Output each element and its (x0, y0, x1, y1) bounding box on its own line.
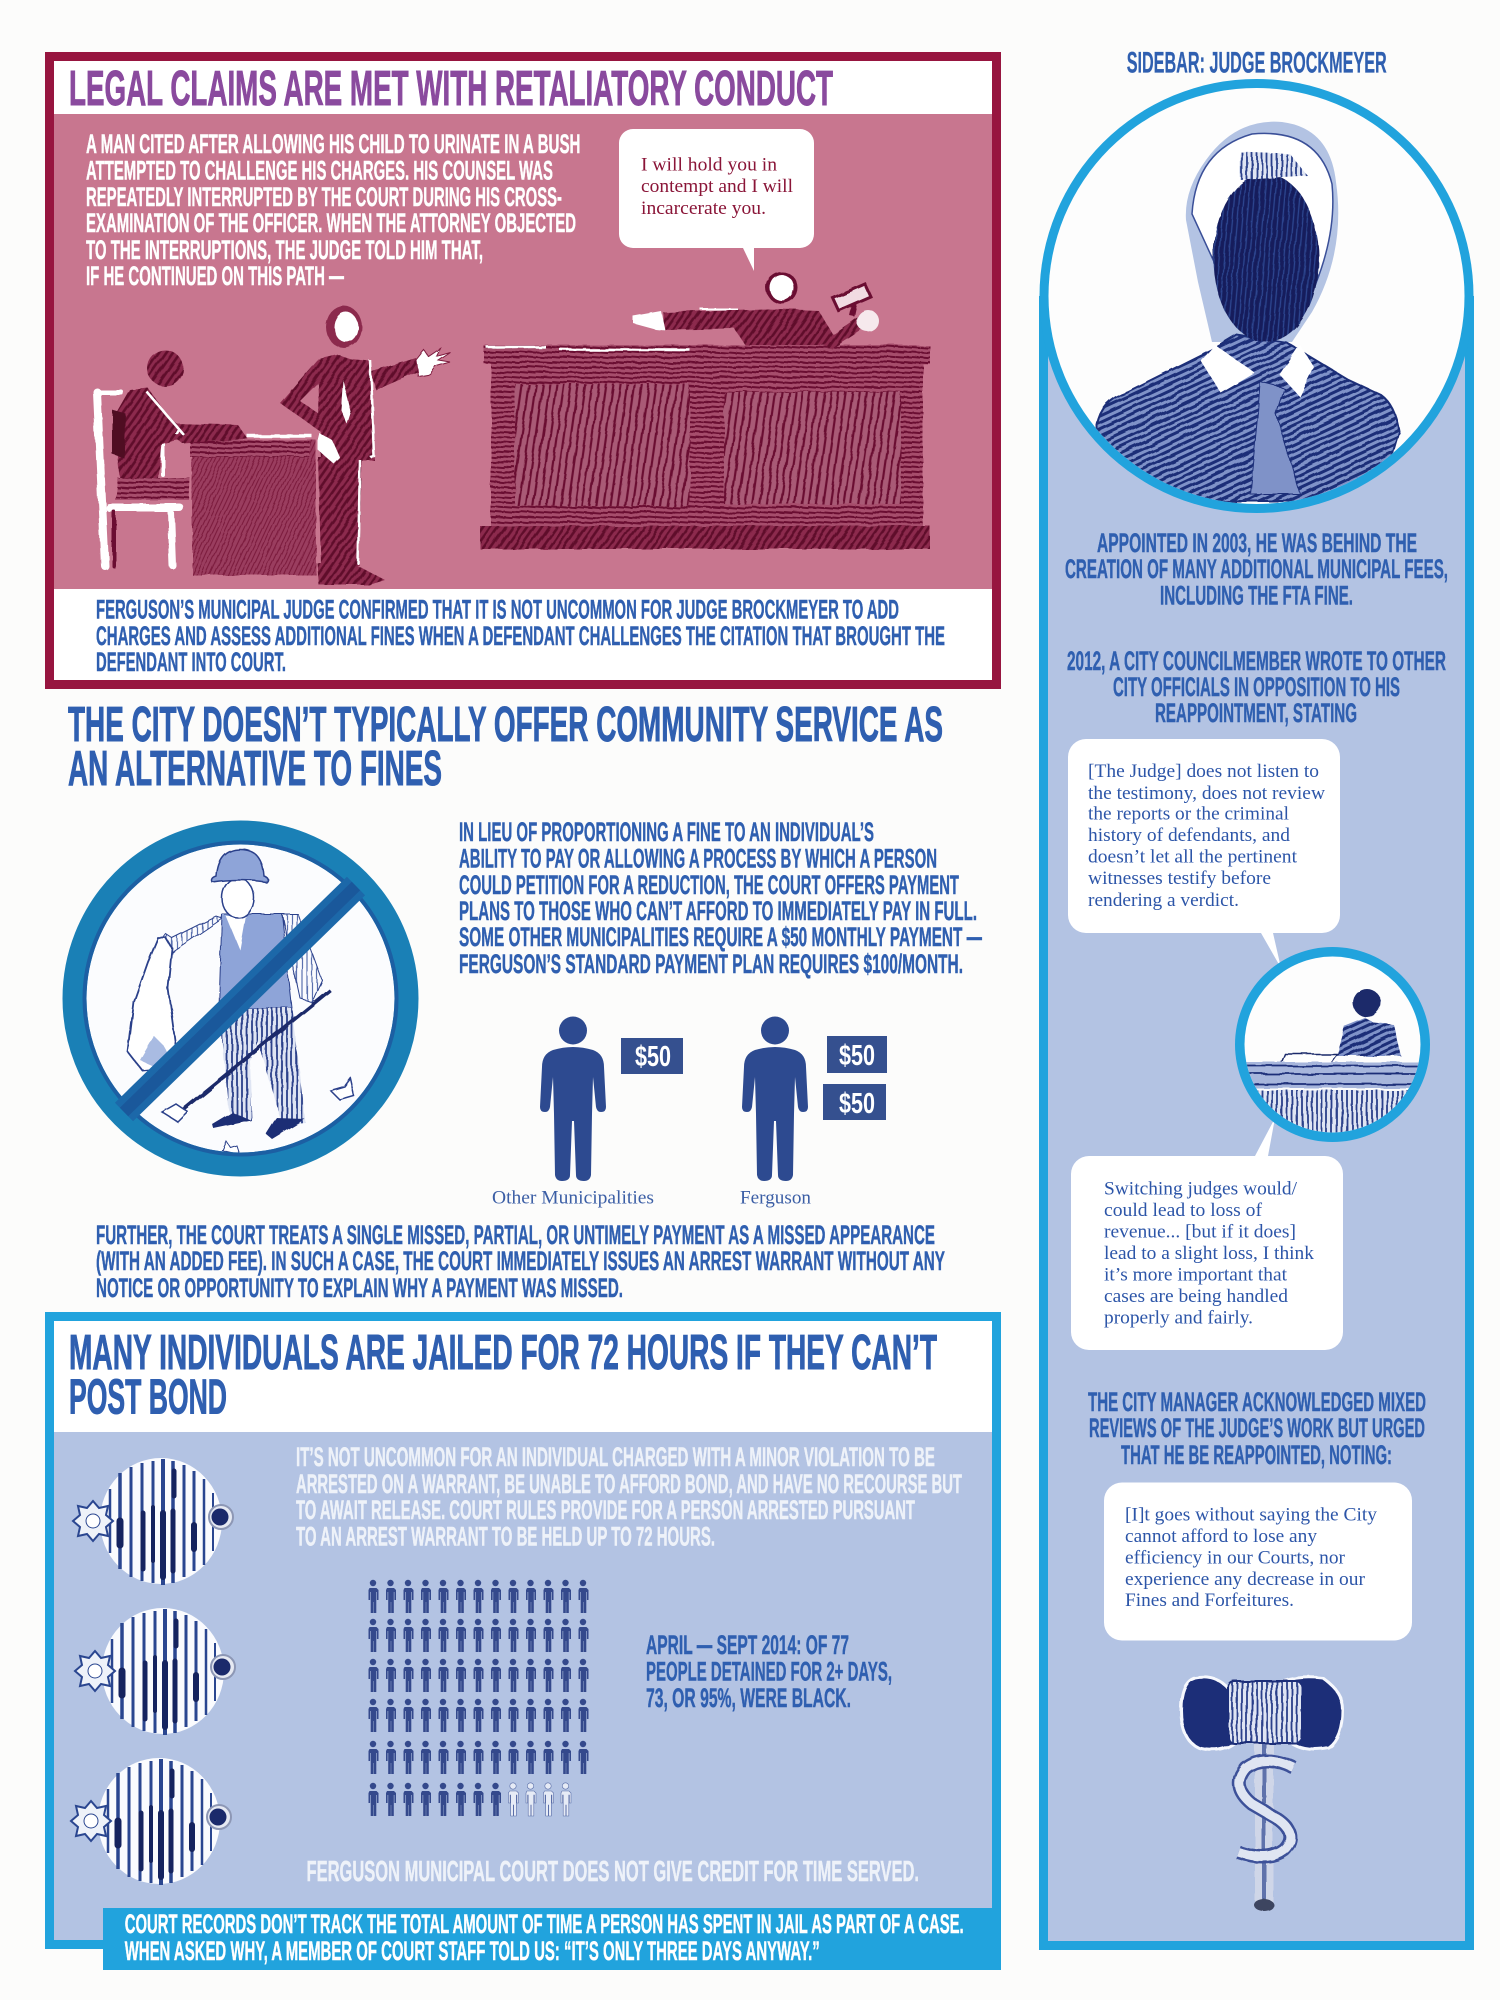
icon: fifty dollar bill: $50 (839, 1040, 875, 1072)
text block: man cited: A MAN CITED AFTER ALLOWING HIS CHILD TO URINATE IN A BUSH (86, 129, 580, 159)
chart: other municipalities pay one bill (492, 1016, 683, 1208)
icon: gavel with dollar-sign handle (1181, 1677, 1343, 1911)
speech bubble: switching judges: lead to a slight loss, I think (1104, 1244, 1315, 1264)
text block: minor violation: ARRESTED ON A WARRANT, BE UNABLE TO AFFORD BOND, AND HAVE NO RECOURSE BUT (296, 1469, 962, 1499)
defendant desk (190, 436, 316, 575)
text block: april to sept statistic: PEOPLE DETAINED FOR 2+ DAYS, (646, 1657, 892, 1687)
text block: missed payment: NOTICE OR OPPORTUNITY TO EXPLAIN WHY A PAYMENT WAS MISSED. (96, 1273, 623, 1303)
text block: in lieu (459, 817, 982, 979)
panel: jailed for 72 hours (45, 1312, 1001, 1970)
text block: municipal judge (96, 595, 945, 677)
speech bubble: switching judges (1071, 1118, 1343, 1350)
icon: second fifty dollar bill (823, 1084, 886, 1120)
text block: in lieu: IN LIEU OF PROPORTIONING A FINE TO AN INDIVIDUAL’S (459, 817, 874, 847)
icon: person (742, 1016, 808, 1181)
speech bubble: contempt: I will hold you in (641, 156, 777, 176)
speech bubble: city cannot afford: [I]t goes without saying the City (1125, 1506, 1378, 1526)
text block: in lieu: PLANS TO THOSE WHO CAN’T AFFORD TO IMMEDIATELY PAY IN FULL. (459, 896, 977, 926)
text block: appointed in 2003: INCLUDING THE FTA FINE. (1160, 580, 1353, 610)
heading: community service (68, 698, 943, 796)
icon: jail cell door three (71, 1758, 231, 1885)
text block: no credit for time served: FERGUSON MUNICIPAL COURT DOES NOT GIVE CREDIT FOR TIME SERVED. (306, 1856, 919, 1888)
icon: fifty dollar bill (827, 1036, 887, 1073)
gavel (833, 284, 871, 316)
speech bubble: does not listen: the reports or the criminal (1088, 804, 1289, 824)
icon: second fifty dollar bill: $50 (839, 1088, 875, 1120)
speech bubble: city cannot afford: cannot afford to lose any (1125, 1527, 1318, 1547)
speech bubble: does not listen: witnesses testify before (1088, 869, 1271, 889)
icon: fifty dollar bill (621, 1038, 683, 1074)
heading: community service: AN ALTERNATIVE TO FINES (68, 742, 442, 796)
icon: jail cell door two (75, 1608, 235, 1735)
speech bubble: switching judges: cases are being handled (1104, 1287, 1289, 1307)
text block: man cited: IF HE CONTINUED ON THIS PATH — (86, 261, 344, 291)
text block: missed payment (96, 1220, 945, 1303)
text block: minor violation: TO AWAIT RELEASE. COURT RULES PROVIDE FOR A PERSON ARRESTED PURSUANT (296, 1495, 915, 1525)
speech bubble: does not listen: the testimony, does not review (1088, 784, 1326, 804)
speech bubble: city cannot afford (1104, 1482, 1412, 1640)
text block: man cited (86, 129, 580, 291)
worker picking up trash (128, 849, 354, 1154)
speech bubble: city cannot afford: Fines and Forfeitures. (1125, 1591, 1294, 1611)
speech bubble: does not listen (1068, 739, 1340, 968)
panel: legal claims (45, 52, 1001, 689)
judge bench (480, 345, 930, 549)
speech bubble: switching judges: Switching judges would/ (1104, 1180, 1298, 1200)
heading: jailed: POST BOND (69, 1370, 227, 1424)
portrait of judge in circle (1040, 79, 1474, 513)
speech bubble: contempt: contempt and I will (641, 177, 793, 197)
heading: legal claims: LEGAL CLAIMS ARE MET WITH RETALIATORY CONDUCT (69, 62, 833, 116)
text block: appointed in 2003 (1065, 528, 1448, 610)
speech bubble: switching judges: could lead to loss of (1104, 1201, 1263, 1221)
speech bubble: does not listen: doesn’t let all the pertinent (1088, 848, 1298, 868)
speech bubble: contempt: incarcerate you. (641, 199, 766, 219)
text block: man cited: EXAMINATION OF THE OFFICER. WHEN THE ATTORNEY OBJECTED (86, 208, 576, 238)
speech bubble: city cannot afford: experience any decrease in our (1125, 1570, 1365, 1590)
speech bubble: does not listen: history of defendants, and (1088, 826, 1291, 846)
text block: minor violation (296, 1442, 962, 1552)
portrait: judge at the bench in circle (1235, 947, 1430, 1142)
text block: man cited: TO THE INTERRUPTIONS, THE JUDGE TOLD HIM THAT, (86, 235, 483, 265)
chart: ferguson pays two bills (740, 1016, 887, 1208)
panel: sidebar judge brockmeyer (1039, 79, 1474, 1950)
heading: jailed (69, 1326, 937, 1424)
callout: court records (125, 1909, 964, 1966)
text block: in lieu: ABILITY TO PAY OR ALLOWING A PROCESS BY WHICH A PERSON (459, 844, 937, 874)
text block: minor violation: IT’S NOT UNCOMMON FOR AN INDIVIDUAL CHARGED WITH A MINOR VIOLATION TO BE (296, 1442, 935, 1472)
speech bubble: switching judges: it’s more important that (1104, 1266, 1288, 1286)
chart: 77 detained people, 73 black (368, 1580, 588, 1816)
illustration: seated defendant, desk and attorney (97, 306, 450, 585)
chair (97, 392, 180, 566)
text block: in lieu: SOME OTHER MUNICIPALITIES REQUIRE A $50 MONTHLY PAYMENT — (459, 922, 982, 952)
text block: city manager (1088, 1387, 1426, 1470)
text block: municipal judge: DEFENDANT INTO COURT. (96, 647, 286, 677)
icon: fifty dollar bill: $50 (635, 1041, 671, 1073)
text block: in lieu: FERGUSON’S STANDARD PAYMENT PLAN REQUIRES $100/MONTH. (459, 949, 963, 979)
text block: 2012 councilmember (1067, 646, 1446, 728)
icon: person (540, 1016, 606, 1181)
text block: april to sept statistic: 73, OR 95%, WERE BLACK. (646, 1683, 851, 1713)
speech bubble: switching judges: properly and fairly. (1104, 1309, 1253, 1329)
text block: minor violation: TO AN ARREST WARRANT TO BE HELD UP TO 72 HOURS. (296, 1522, 715, 1552)
judge figure (633, 272, 879, 349)
panel: community service (68, 698, 982, 1303)
text block: in lieu: COULD PETITION FOR A REDUCTION, THE COURT OFFERS PAYMENT (459, 870, 959, 900)
illustration: judge and bench (480, 272, 930, 549)
speech bubble: does not listen: [The Judge] does not listen to (1088, 762, 1319, 782)
seated person (112, 350, 248, 500)
attorney (280, 306, 450, 585)
icon: prohibited worker sign (74, 832, 406, 1164)
speech bubble: contempt (619, 129, 814, 271)
text block: man cited: ATTEMPTED TO CHALLENGE HIS CHARGES. HIS COUNSEL WAS (86, 156, 553, 186)
speech bubble: switching judges: revenue... [but if it does] (1104, 1222, 1296, 1242)
text block: april to sept statistic (646, 1630, 892, 1713)
label: ferguson: Ferguson (740, 1188, 811, 1208)
label: other municipalities: Other Municipalities (492, 1188, 654, 1208)
speech bubble: does not listen: rendering a verdict. (1088, 891, 1239, 911)
callout: court records: WHEN ASKED WHY, A MEMBER OF COURT STAFF TOLD US: “IT’S ONLY THREE DAYS ANYWAY.” (125, 1936, 820, 1966)
text block: april to sept statistic: APRIL — SEPT 2014: OF 77 (646, 1630, 849, 1660)
speech bubble: city cannot afford: efficiency in our Courts, nor (1125, 1549, 1345, 1569)
icon: jail cell door one (73, 1458, 233, 1585)
text block: man cited: REPEATEDLY INTERRUPTED BY THE COURT DURING HIS CROSS- (86, 182, 562, 212)
